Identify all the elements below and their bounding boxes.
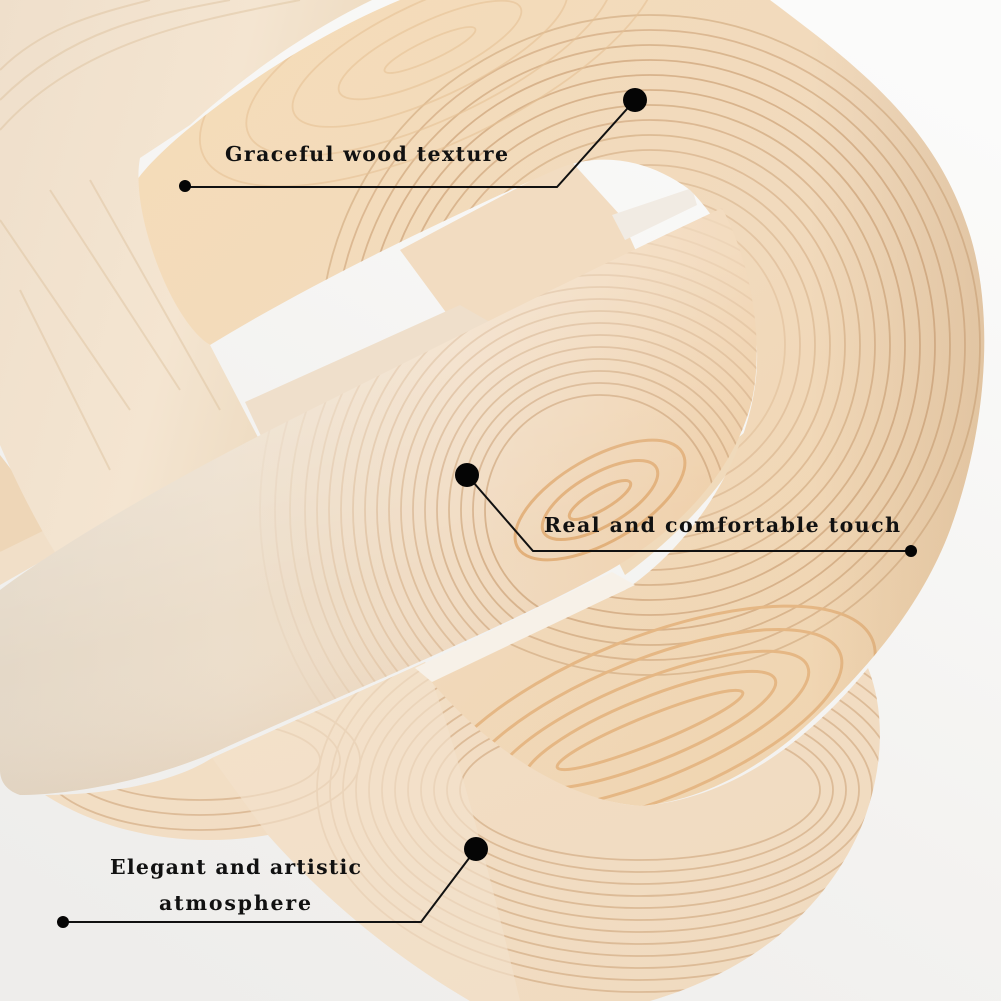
left wooden tube — [0, 0, 372, 560]
large marker dot — [455, 463, 479, 487]
small marker dot — [179, 180, 191, 192]
small marker dot — [905, 545, 917, 557]
tube grain — [0, 0, 300, 470]
small marker dot — [57, 916, 69, 928]
large marker dot — [623, 88, 647, 112]
back bars — [0, 160, 745, 585]
label: Graceful wood texture — [225, 142, 508, 166]
label: Real and comfortable touch — [544, 513, 900, 537]
label line two: atmosphere — [159, 891, 311, 915]
leader line — [185, 100, 635, 187]
pale gap under front tube — [415, 572, 635, 682]
callout: real and comfortable touch — [455, 463, 917, 557]
label line one: Elegant and artistic — [110, 855, 361, 879]
large marker dot — [464, 837, 488, 861]
bottom loop grain — [60, 671, 880, 993]
leader line — [63, 849, 476, 922]
arc grain — [199, 0, 981, 806]
front wooden tube — [0, 210, 757, 795]
large wooden arc — [138, 0, 984, 806]
callout: graceful wood texture — [179, 88, 647, 192]
arc edge shading — [137, 0, 984, 806]
bottom wooden loop — [45, 662, 880, 1001]
front tube grain — [274, 226, 757, 699]
callout: elegant and artistic atmosphere — [57, 837, 488, 928]
leader line — [467, 475, 911, 551]
